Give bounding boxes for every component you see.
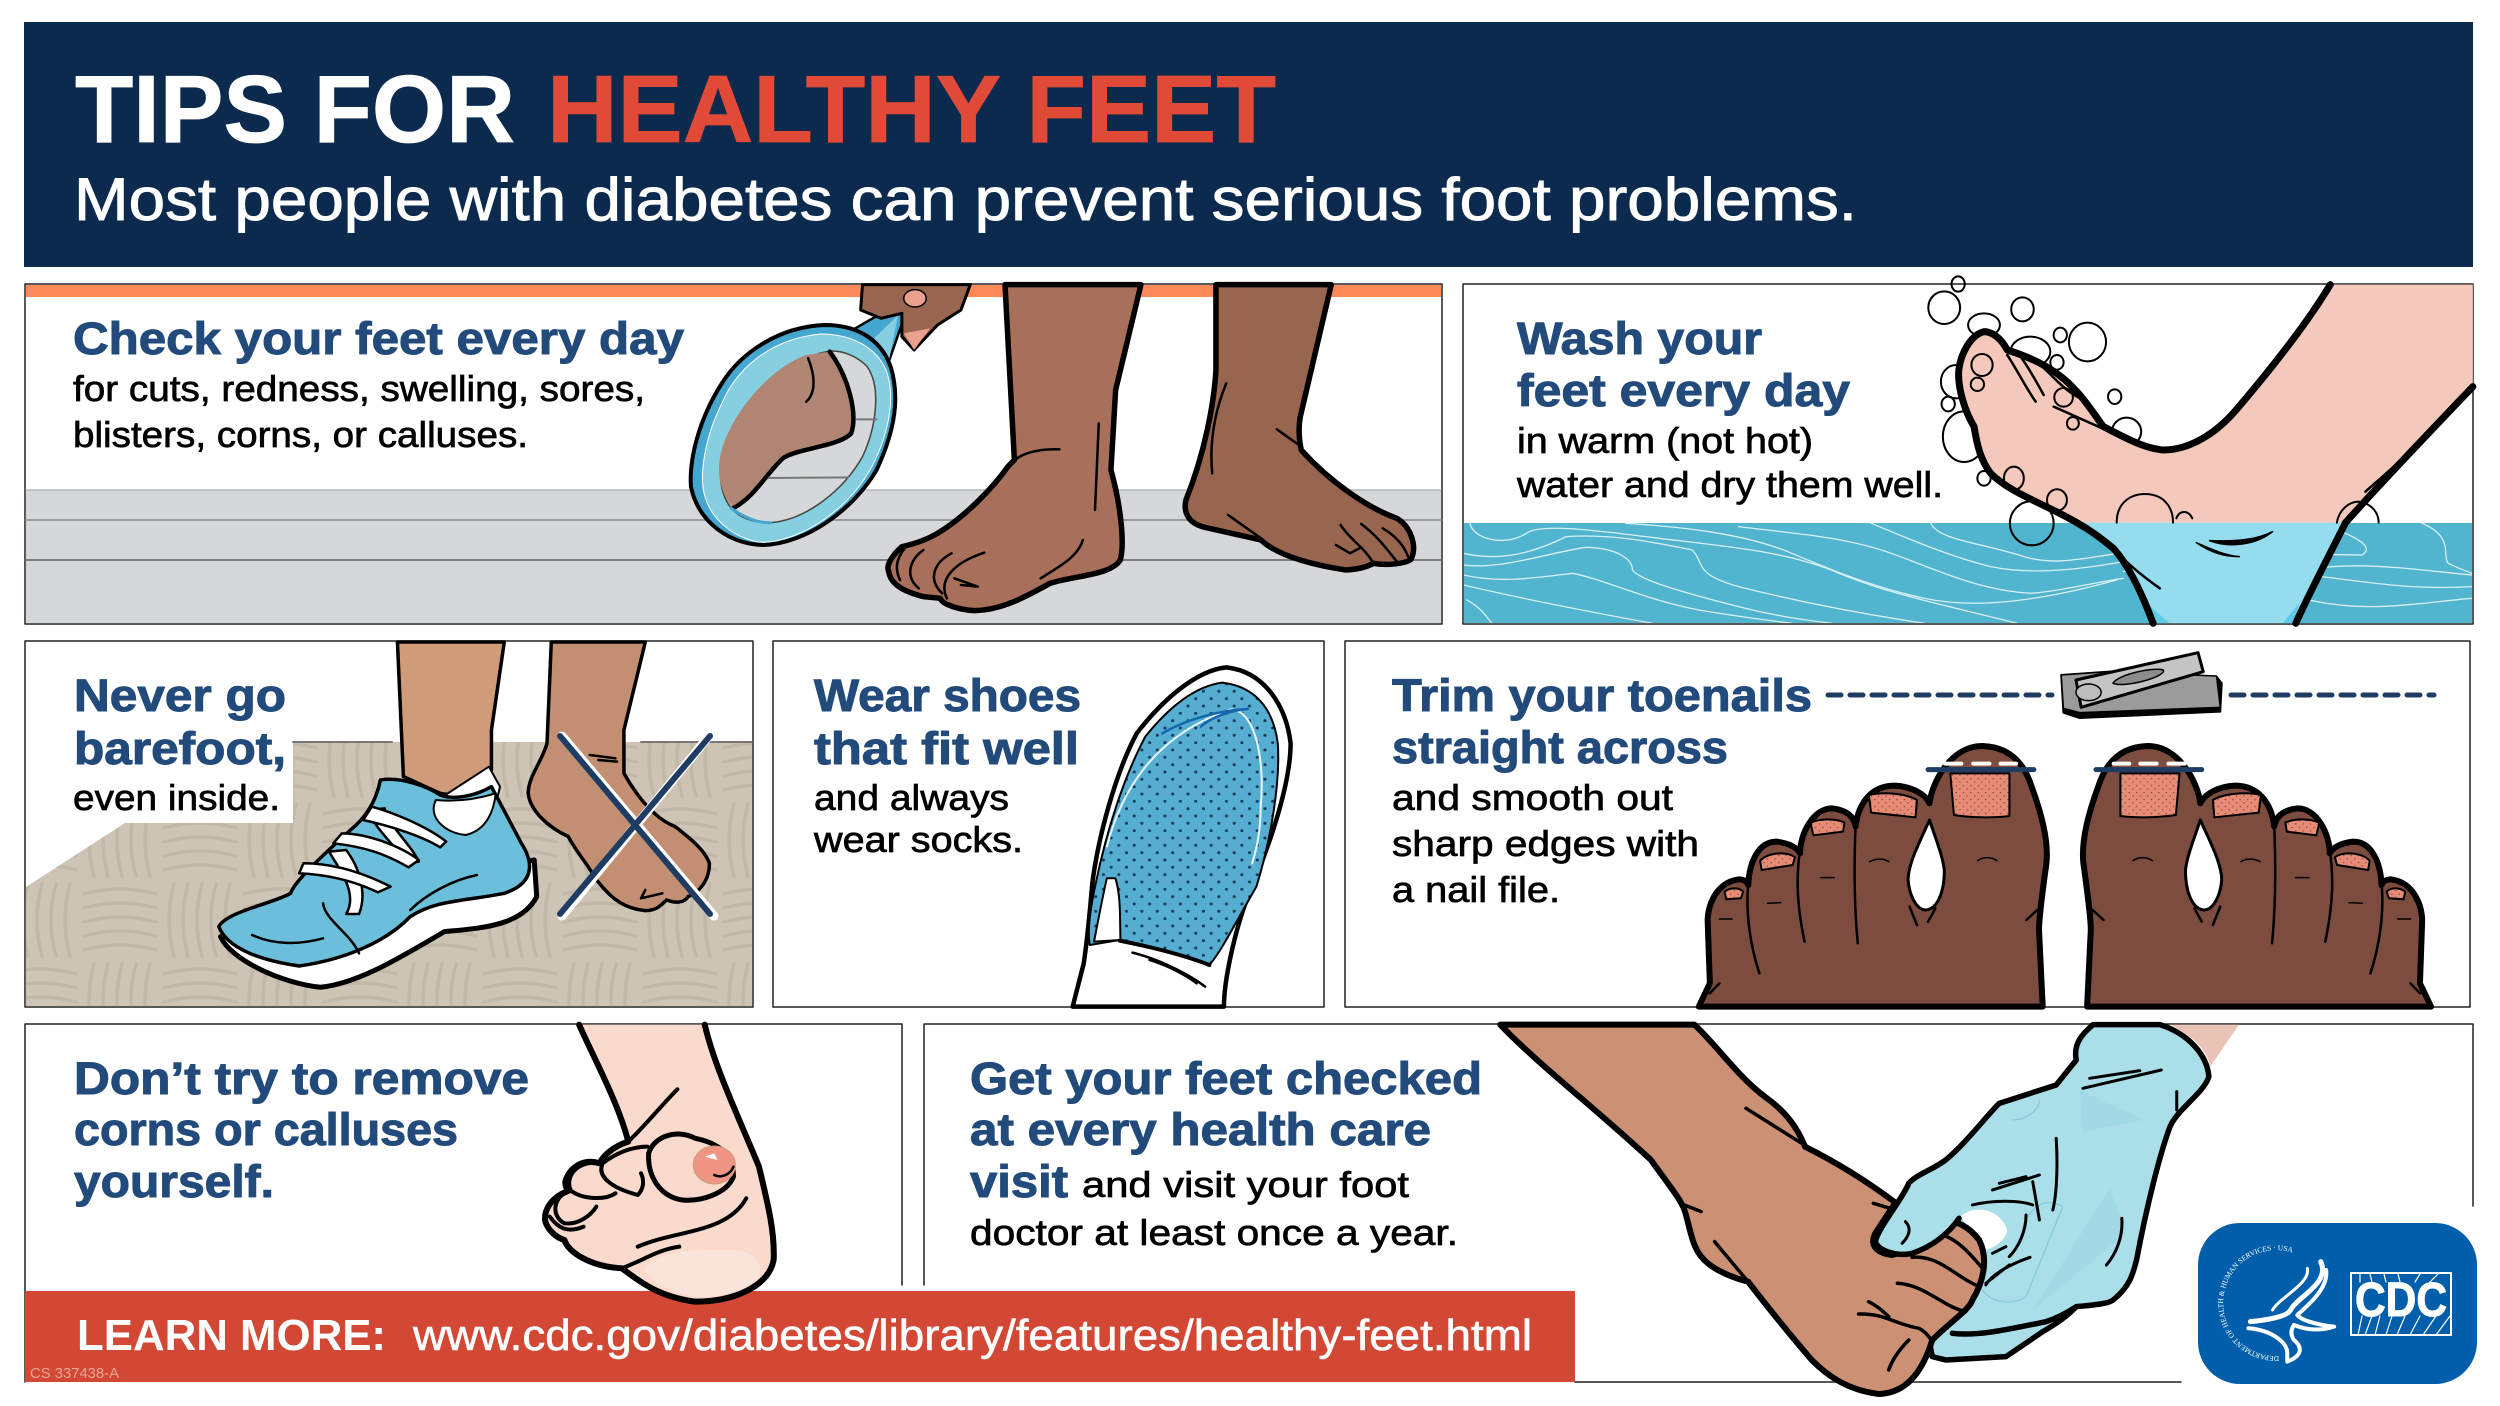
link text: www.cdc.gov/diabetes/library/features/healthy-feet.html xyxy=(412,1311,1532,1360)
body text: water and dry them well. xyxy=(1516,464,1943,505)
floor mat xyxy=(26,742,752,1006)
heading xyxy=(814,670,1081,774)
body text xyxy=(73,368,645,455)
illustration: foot with corn xyxy=(545,1025,774,1302)
hand holding magnifier xyxy=(861,285,970,350)
heading xyxy=(74,670,286,774)
illustration: foot held by gloved hand xyxy=(1500,1025,2239,1394)
HHS seal text: DEPARTMENT OF HEALTH & HUMAN SERVICES · USA xyxy=(2218,1245,2292,1361)
icon: nail clipper xyxy=(2061,653,2222,718)
learn more banner xyxy=(25,1291,1575,1382)
body text: and visit your foot xyxy=(1082,1164,1409,1205)
body text xyxy=(970,1164,1458,1253)
foot xyxy=(1500,1025,1984,1394)
panel: get feet checked xyxy=(924,1024,2473,1382)
body text: and always xyxy=(814,777,1009,818)
panel: wash your feet xyxy=(1463,276,2473,624)
body text: blisters, corns, or calluses. xyxy=(73,414,528,455)
heading: Check your feet every day xyxy=(73,313,684,364)
illustration: shoe insole xyxy=(1073,667,1291,1007)
body text: a nail file. xyxy=(1392,869,1560,910)
heading: Trim your toenails xyxy=(1392,670,1812,721)
wrist xyxy=(2170,1025,2239,1067)
heading: Wear shoes xyxy=(814,670,1081,721)
title: HEALTHY FEET xyxy=(547,56,1276,163)
panel: trim your toenails xyxy=(1345,641,2470,1007)
gap between hand and foot xyxy=(1960,1210,2007,1250)
heading: Don’t try to remove xyxy=(74,1053,529,1104)
dashed cut guide xyxy=(1828,692,2434,698)
panel: never go barefoot xyxy=(25,641,753,1007)
body text: doctor at least once a year. xyxy=(970,1212,1458,1253)
illustration: foot and bubbles xyxy=(1928,276,2473,623)
title: TIPS FOR xyxy=(75,56,515,163)
body text: for cuts, redness, swelling, sores, xyxy=(73,368,645,409)
heading: Never go xyxy=(74,670,286,721)
bubbles behind foot xyxy=(1928,276,2141,545)
heading: straight across xyxy=(1392,722,1728,773)
CDC mark: CDC xyxy=(2355,1274,2447,1327)
heading: yourself. xyxy=(74,1156,274,1207)
body text: wear socks. xyxy=(813,819,1023,860)
water xyxy=(1463,523,2472,623)
heading xyxy=(970,1053,1482,1207)
panel: check your feet xyxy=(25,284,1442,624)
body text: sharp edges with xyxy=(1392,823,1699,864)
body text: in warm (not hot) xyxy=(1517,420,1813,461)
glove xyxy=(1875,1025,2209,1360)
illustration: bare foot xyxy=(528,642,709,911)
heading xyxy=(1392,670,1812,773)
heading: corns or calluses xyxy=(74,1104,458,1155)
panel: do not remove corns xyxy=(25,1024,902,1382)
HHS eagle xyxy=(2248,1262,2334,1362)
header banner xyxy=(24,22,2473,267)
icon: magnifying glass xyxy=(691,311,906,545)
heading: at every health care xyxy=(970,1104,1431,1155)
body text: and smooth out xyxy=(1392,777,1673,818)
heading: Get your feet checked xyxy=(970,1053,1482,1104)
heading: that fit well xyxy=(814,723,1079,774)
heading: feet every day xyxy=(1517,365,1850,416)
bubbles over foot xyxy=(1971,354,2379,523)
heading: visit xyxy=(970,1156,1068,1207)
publication code: CS 337438-A xyxy=(30,1365,119,1382)
title xyxy=(75,56,1276,163)
illustration: rear foot xyxy=(1185,285,1413,570)
link text: LEARN MORE: xyxy=(77,1311,386,1360)
body text xyxy=(1516,420,1943,505)
illustration: leg with sneaker xyxy=(219,642,537,987)
heading xyxy=(74,1053,529,1207)
subtitle: Most people with diabetes can prevent serious foot problems. xyxy=(74,166,1857,233)
body text: even inside. xyxy=(73,777,280,818)
body text xyxy=(1392,777,1699,910)
heading: Wash your xyxy=(1517,313,1762,364)
panel: wear shoes that fit xyxy=(773,641,1324,1007)
icon: X mark xyxy=(560,736,714,916)
illustration: front foot xyxy=(888,285,1141,611)
heading: barefoot, xyxy=(74,723,286,774)
body text xyxy=(813,777,1023,860)
thumb and glove folds xyxy=(1875,1183,1982,1254)
logo: HHS and CDC xyxy=(2198,1223,2477,1384)
heading xyxy=(1517,313,1850,416)
illustration: toes xyxy=(1699,746,2431,1007)
